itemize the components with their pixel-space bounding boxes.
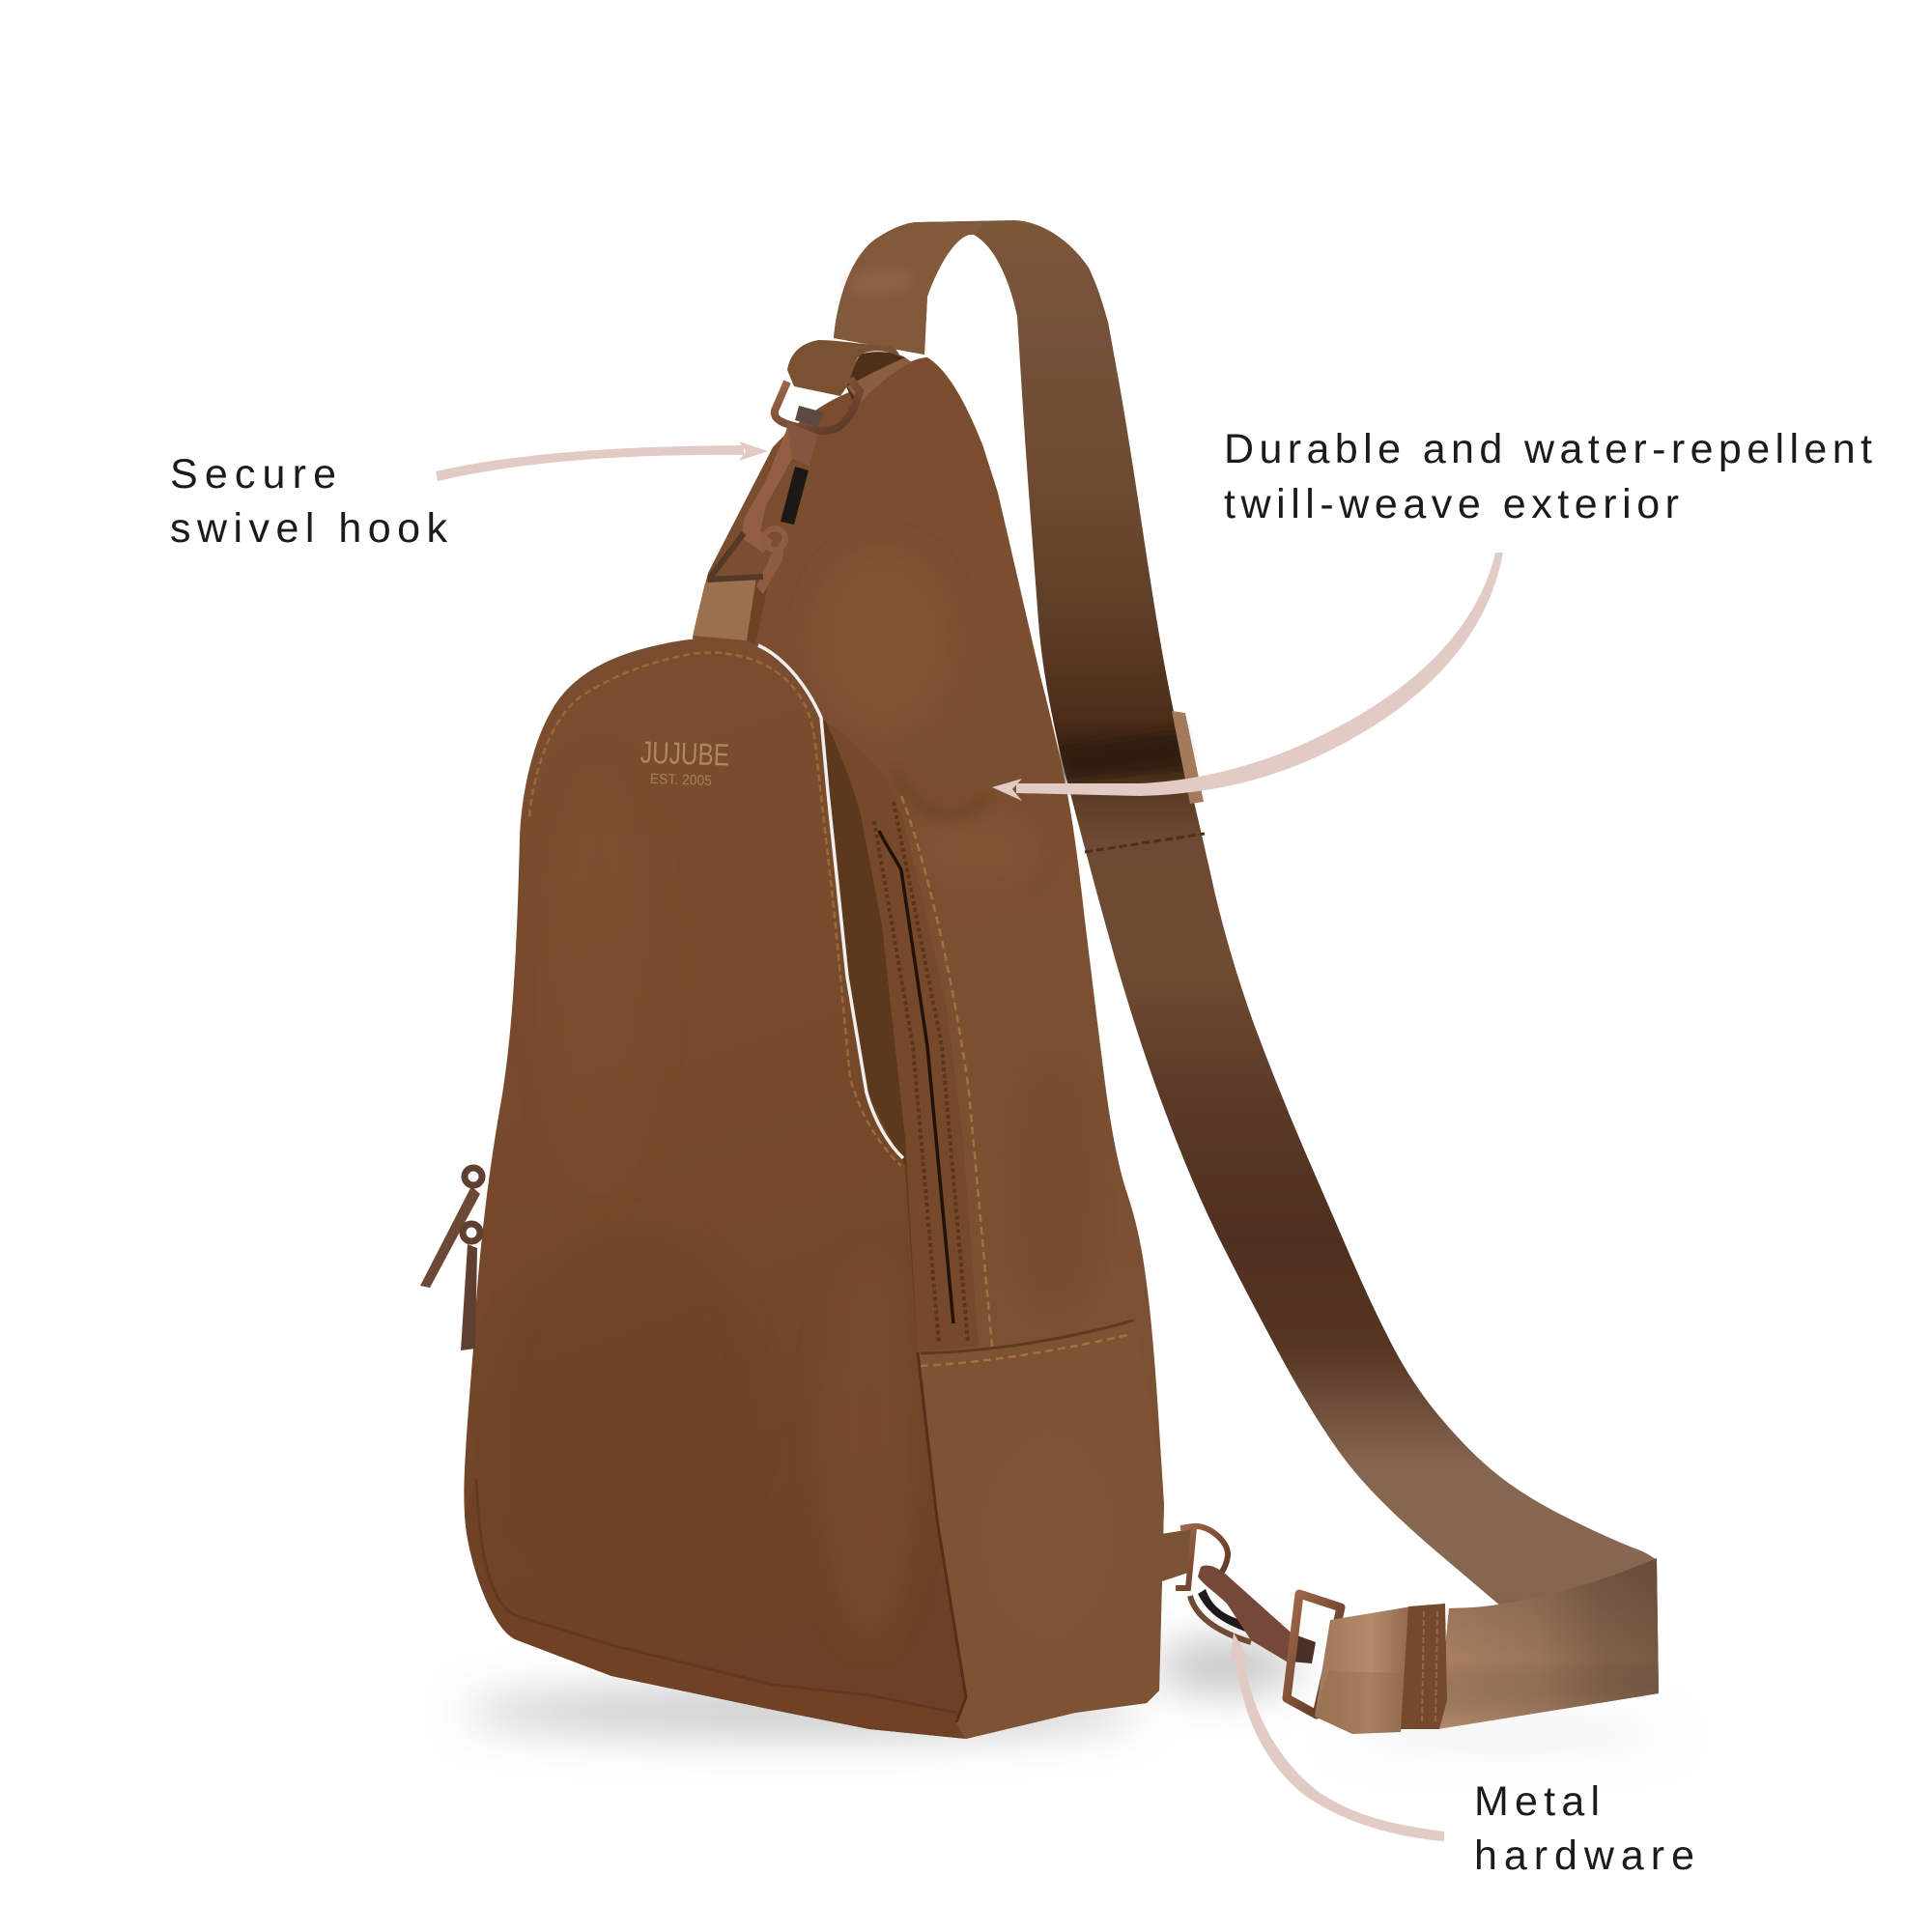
zipper opening	[821, 718, 924, 1351]
product photo: brown sling bag	[420, 220, 1671, 1748]
hook body	[1198, 1566, 1302, 1663]
label: secure swivel hook: swivel hook	[170, 505, 448, 552]
fabric tab	[1161, 1529, 1191, 1581]
strap slider buckle	[1172, 711, 1204, 804]
white piping	[758, 645, 903, 1158]
label: metal hardware: hardware	[1474, 1833, 1694, 1879]
swivel hook	[708, 379, 860, 594]
collar	[784, 422, 818, 466]
upper strap loop	[787, 340, 912, 406]
hook body	[742, 428, 792, 553]
logo: JUJUBE	[639, 734, 730, 773]
front panel top stitching	[529, 653, 901, 1166]
D ring	[775, 379, 860, 431]
arrow: metal hardware	[1230, 1633, 1444, 1841]
arrow: exterior fabric	[992, 553, 1503, 801]
gate	[1198, 1589, 1254, 1633]
upper connector tab	[693, 578, 768, 645]
front panel shading	[454, 763, 966, 1748]
front panel right edge	[918, 1352, 966, 1722]
front panel	[454, 638, 966, 1748]
strap front loop highlight	[834, 221, 982, 355]
label: durable exterior: twill-weave exterior	[1224, 481, 1679, 527]
lower metal hardware	[1161, 1526, 1341, 1715]
second pull	[461, 1244, 477, 1350]
infographic canvas	[171, 220, 1872, 1870]
strap end fold and keeper	[1315, 1604, 1447, 1734]
bottom gusset panel	[918, 1321, 1164, 1739]
d ring	[1176, 1526, 1228, 1588]
zipper	[826, 723, 979, 1351]
label: durable exterior: Durable and water-repellent	[1224, 426, 1872, 472]
snap hook lower curve	[1190, 1596, 1251, 1642]
logo	[639, 734, 730, 789]
strap fold shadow at slider	[1058, 731, 1188, 782]
strap lighter sheen on loop	[847, 266, 915, 298]
pin	[1290, 1634, 1316, 1663]
label: secure swivel hook	[170, 451, 448, 552]
side panel soft folds	[816, 551, 1087, 1304]
shoulder strap	[834, 220, 1659, 1729]
rectangular buckle	[1287, 1594, 1341, 1715]
logo: EST. 2005	[650, 771, 712, 789]
gusset top seam	[921, 1321, 1133, 1353]
side seam stitching	[901, 796, 992, 1347]
frame	[708, 533, 763, 580]
label: secure swivel hook: Secure	[170, 451, 336, 497]
side panel	[693, 357, 1164, 1739]
pin	[795, 406, 824, 427]
label: metal hardware: Metal	[1474, 1778, 1600, 1825]
strap tan face shading	[1437, 1558, 1659, 1729]
gusset soft shading	[980, 1430, 1116, 1642]
gusset stitching	[921, 1335, 1127, 1366]
lower link	[756, 536, 784, 594]
strap stitch line	[1085, 834, 1205, 852]
ring	[764, 528, 785, 550]
gate	[781, 467, 809, 525]
label: metal hardware	[1474, 1778, 1694, 1879]
ground shadow	[464, 1641, 1671, 1744]
zipper pulls	[420, 1168, 482, 1350]
label: durable exterior	[1224, 426, 1872, 527]
arrow: swivel hook	[436, 441, 768, 481]
first pull	[420, 1186, 480, 1288]
strap tan front face	[1437, 1558, 1659, 1729]
